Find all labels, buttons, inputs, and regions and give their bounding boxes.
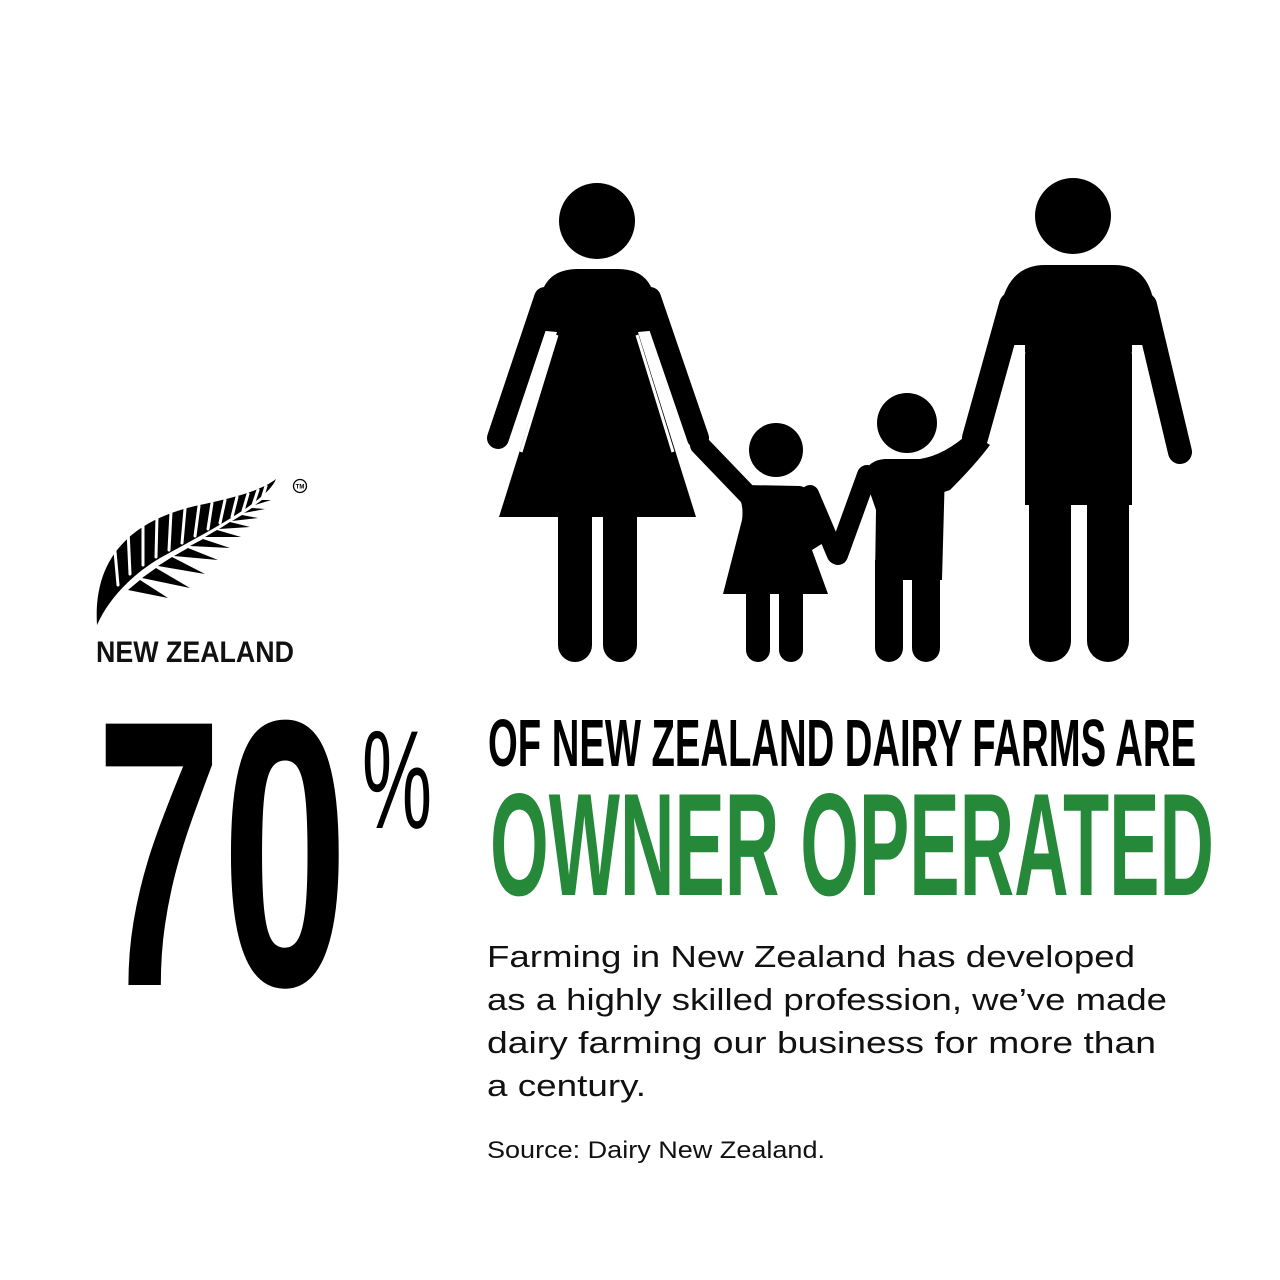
heading bbox=[488, 706, 1214, 926]
body text: Farming in New Zealand has developed bbox=[487, 939, 1135, 974]
icon: silver fern bbox=[97, 479, 276, 625]
icon: trademark bbox=[294, 480, 306, 492]
statistic: 70%: % bbox=[362, 701, 432, 858]
figure: man bbox=[975, 178, 1180, 662]
body text: a century. bbox=[487, 1068, 646, 1103]
figure: girl bbox=[700, 423, 836, 662]
logo text: NEW ZEALAND bbox=[96, 636, 294, 669]
statistic: 70%: 70 bbox=[96, 641, 348, 1066]
source note: Source: Dairy New Zealand. bbox=[487, 1137, 825, 1164]
figure: woman bbox=[498, 183, 698, 662]
icon: trademark: TM bbox=[296, 484, 304, 490]
logo: New Zealand fern bbox=[96, 479, 306, 669]
figure: boy bbox=[838, 393, 990, 662]
illustration: family silhouettes bbox=[498, 178, 1180, 662]
body text bbox=[487, 939, 1167, 1103]
body text: as a highly skilled profession, we’ve made bbox=[487, 982, 1167, 1017]
body text: dairy farming our business for more than bbox=[487, 1025, 1156, 1060]
